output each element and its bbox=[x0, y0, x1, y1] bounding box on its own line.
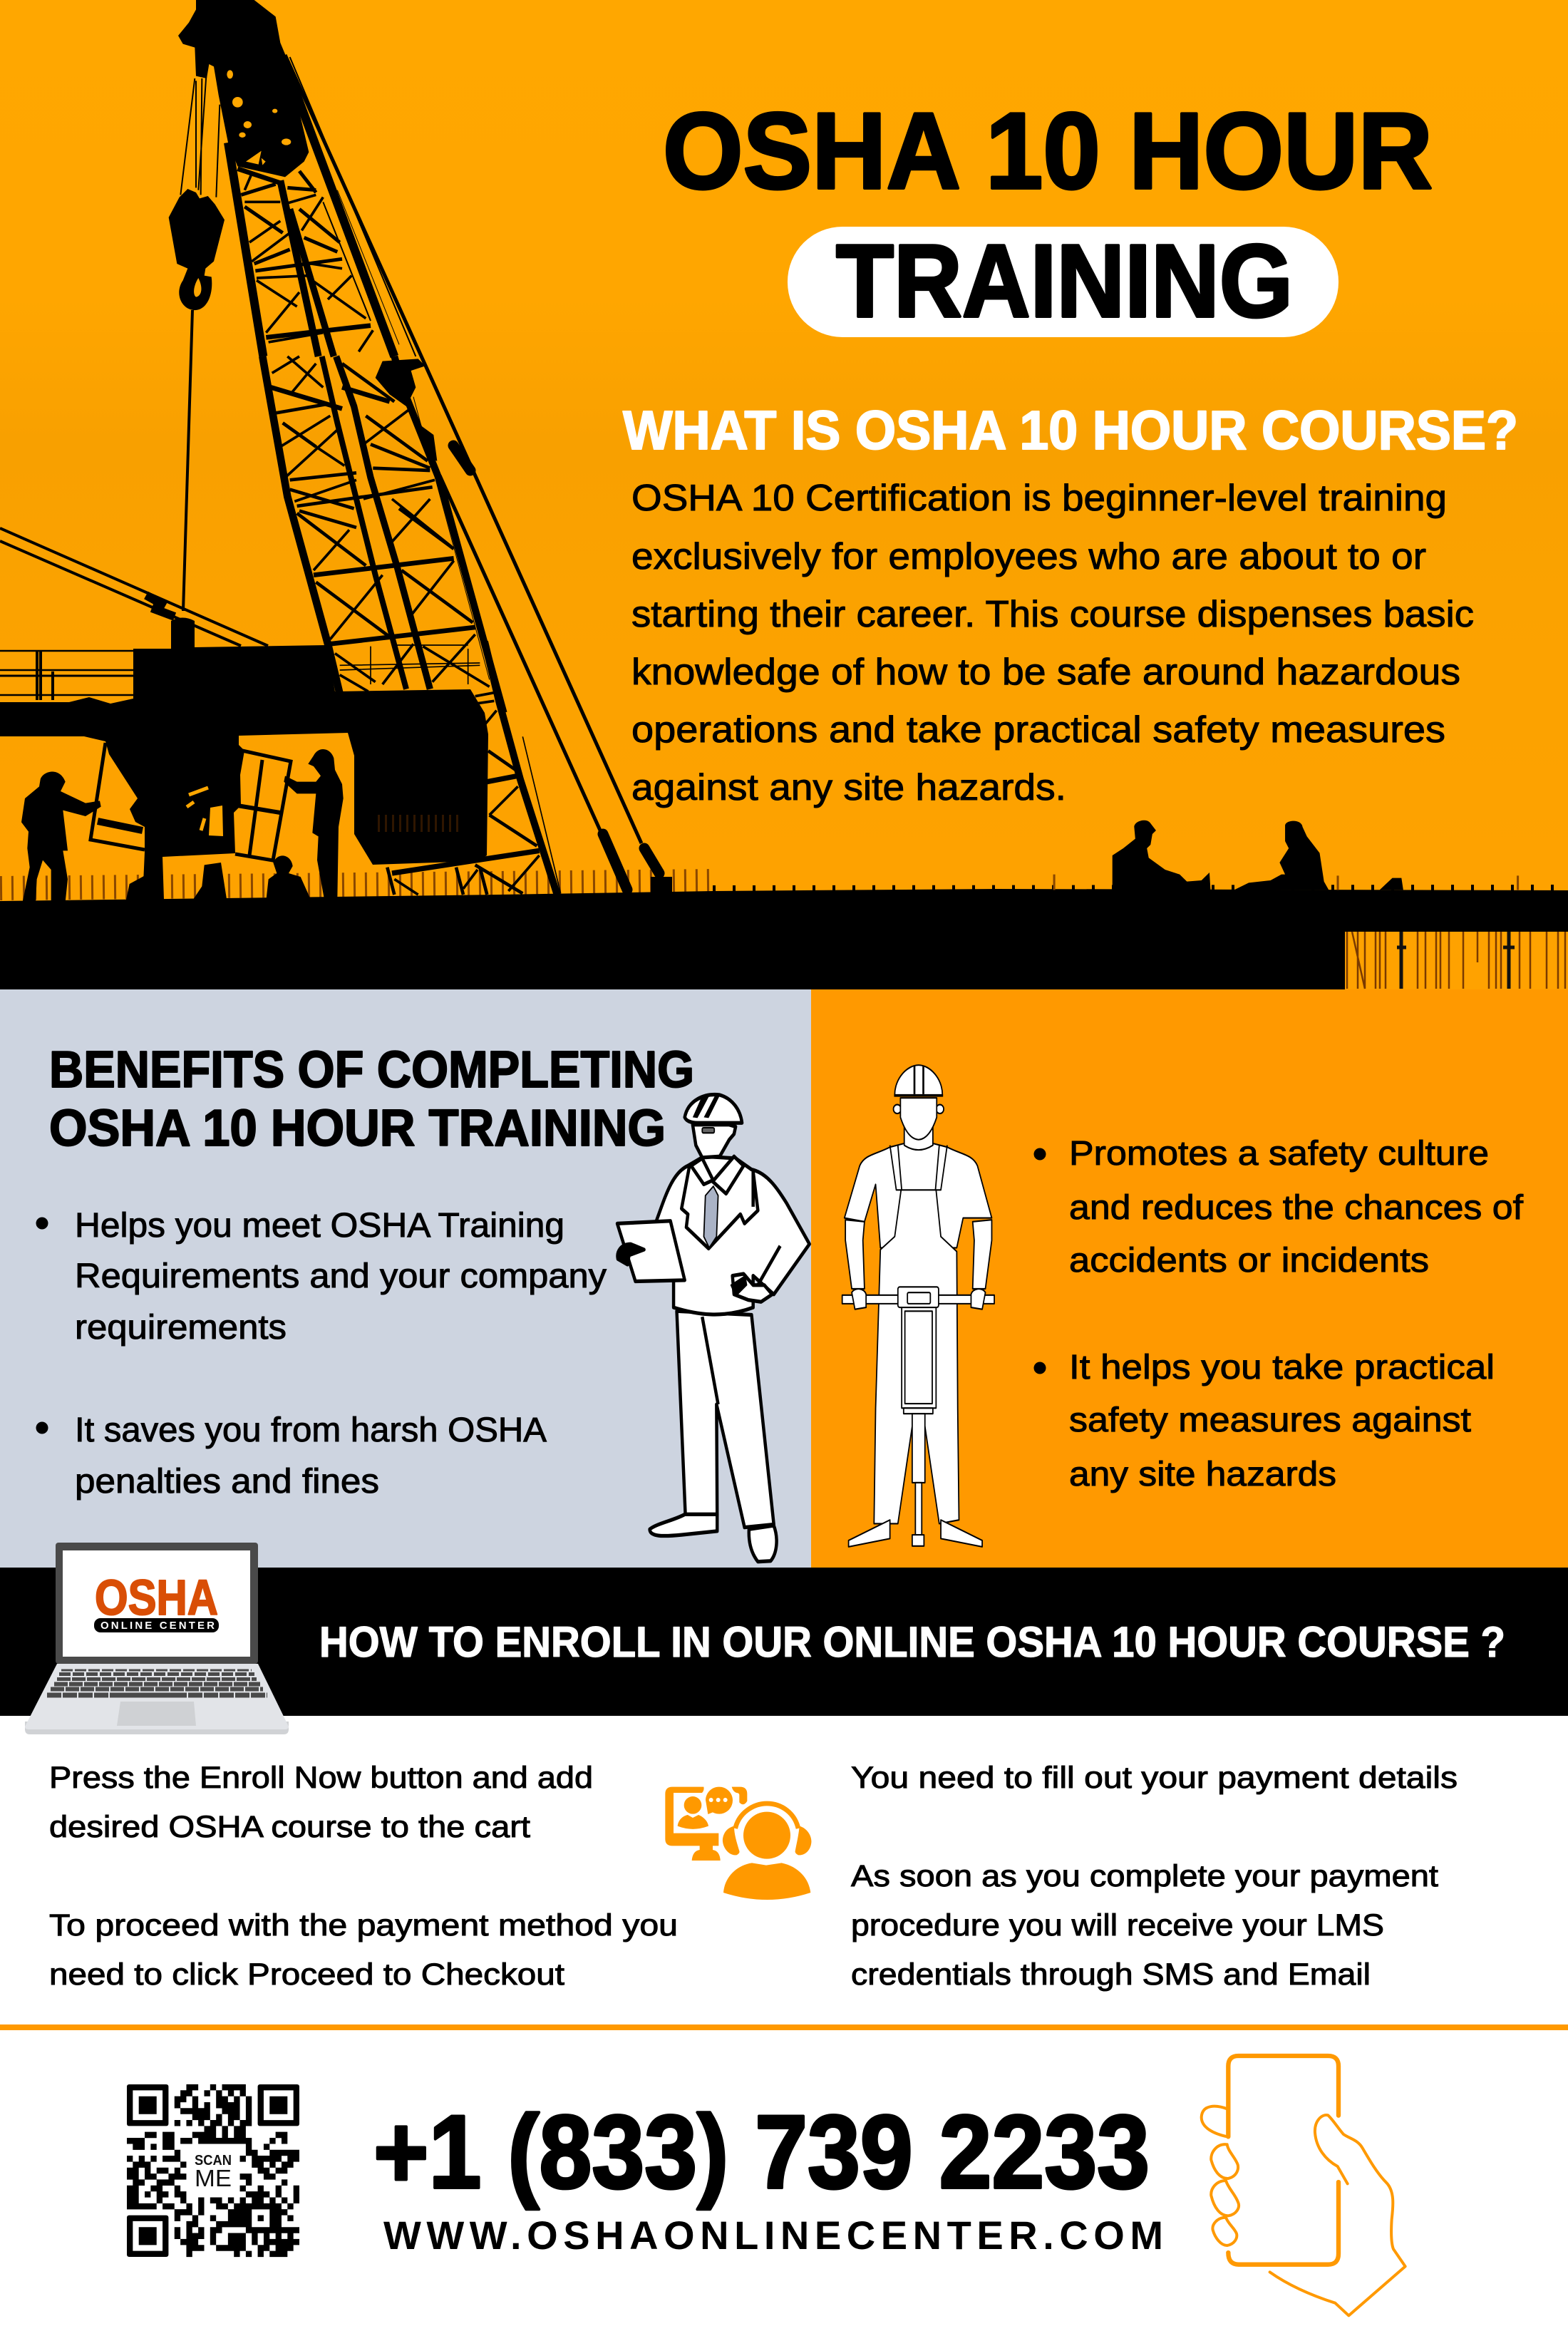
QR code: ME bbox=[195, 2165, 232, 2191]
heading: benefits: BENEFITS OF COMPLETING bbox=[49, 1041, 694, 1099]
box rebars bbox=[378, 815, 463, 832]
crane lattice upper bbox=[169, 0, 416, 356]
crane cables bbox=[0, 55, 672, 895]
heading: what is: WHAT IS OSHA 10 HOUR COURSE? bbox=[623, 400, 1518, 461]
logo: ONLINE CENTER bbox=[100, 1620, 215, 1632]
logo: OSHA bbox=[95, 1570, 218, 1625]
steps left: To proceed with the payment method you bbox=[49, 1908, 678, 1943]
steps right: procedure you will receive your LMS bbox=[851, 1908, 1384, 1943]
bullet list right: Promotes a safety culture bbox=[1069, 1135, 1489, 1173]
bullet list right: any site hazards bbox=[1069, 1456, 1336, 1493]
walkway rails bbox=[0, 650, 146, 700]
band: how to enroll bbox=[0, 1568, 1568, 1716]
phone number: +1 (833) 739 2233 bbox=[373, 2094, 1150, 2210]
worker on crane bbox=[376, 359, 437, 461]
rebar fence bbox=[0, 881, 1568, 888]
bullet list left: Requirements and your company bbox=[75, 1257, 607, 1295]
icon: hand holding phone bbox=[1202, 2056, 1405, 2315]
QR code bbox=[127, 2084, 299, 2257]
heading: benefits: OSHA 10 HOUR TRAINING bbox=[49, 1100, 666, 1157]
bullet list right: safety measures against bbox=[1069, 1401, 1471, 1439]
hook wire bbox=[183, 310, 192, 611]
ground bbox=[0, 889, 1568, 989]
title pill: TRAINING bbox=[836, 223, 1293, 339]
panel: benefits left bbox=[0, 989, 813, 1568]
steps right bbox=[851, 1761, 1458, 1992]
intro paragraph: exclusively for employees who are about to or bbox=[631, 536, 1426, 577]
band: how to enroll: HOW TO ENROLL IN OUR ONLINE OSHA 10 HOUR COURSE ? bbox=[319, 1618, 1505, 1666]
window frame bbox=[91, 743, 291, 860]
bullet list left: penalties and fines bbox=[75, 1463, 379, 1501]
bullet list left: Helps you meet OSHA Training bbox=[75, 1207, 564, 1245]
icon: engineer bbox=[617, 1094, 810, 1562]
title: OSHA 10 HOUR bbox=[663, 91, 1433, 212]
crane head bbox=[178, 0, 309, 177]
panel: hero bbox=[0, 0, 1568, 989]
workers silhouette left bbox=[21, 749, 344, 902]
intro paragraph: against any site hazards. bbox=[631, 767, 1066, 808]
steps left bbox=[49, 1761, 678, 1992]
bullet list right: It helps you take practical bbox=[1069, 1349, 1495, 1386]
fence under ground bbox=[1347, 932, 1565, 989]
orange divider bbox=[0, 2024, 1568, 2030]
bullet list right: accidents or incidents bbox=[1069, 1242, 1429, 1280]
crane lattice base bbox=[387, 642, 561, 895]
workers silhouette right bbox=[1054, 820, 1518, 890]
icon: worker with jackhammer bbox=[842, 1065, 994, 1547]
icon: crane hook block bbox=[169, 189, 225, 310]
bullet list left: requirements bbox=[75, 1309, 287, 1347]
intro paragraph: OSHA 10 Certification is beginner-level training bbox=[631, 478, 1447, 519]
QR code: SCAN bbox=[195, 2153, 232, 2168]
crane deck and machine box bbox=[0, 617, 488, 900]
bullet list right bbox=[1034, 1135, 1524, 1493]
icon: laptop with logo bbox=[25, 1543, 289, 1734]
bullet list left: It saves you from harsh OSHA bbox=[75, 1411, 547, 1449]
website: WWW.OSHAONLINECENTER.COM bbox=[383, 2213, 1163, 2258]
intro paragraph: operations and take practical safety measures bbox=[631, 709, 1445, 751]
steps right: As soon as you complete your payment bbox=[851, 1859, 1438, 1893]
intro paragraph: knowledge of how to be safe around hazardous bbox=[631, 652, 1460, 693]
panel: benefits right bbox=[811, 989, 1568, 1568]
steps right: credentials through SMS and Email bbox=[851, 1957, 1371, 1992]
icon: support headset and monitor bbox=[665, 1787, 811, 1900]
intro paragraph bbox=[631, 478, 1474, 808]
steps left: need to click Proceed to Checkout bbox=[49, 1957, 564, 1992]
crane lattice lower bbox=[262, 356, 504, 713]
bullet list right: and reduces the chances of bbox=[1069, 1189, 1524, 1227]
steps left: desired OSHA course to the cart bbox=[49, 1810, 530, 1844]
bullet list left bbox=[36, 1207, 607, 1501]
steps right: You need to fill out your payment details bbox=[851, 1761, 1458, 1795]
intro paragraph: starting their career. This course dispenses basic bbox=[631, 594, 1474, 635]
heading: benefits bbox=[49, 1041, 694, 1157]
steps left: Press the Enroll Now button and add bbox=[49, 1761, 593, 1795]
